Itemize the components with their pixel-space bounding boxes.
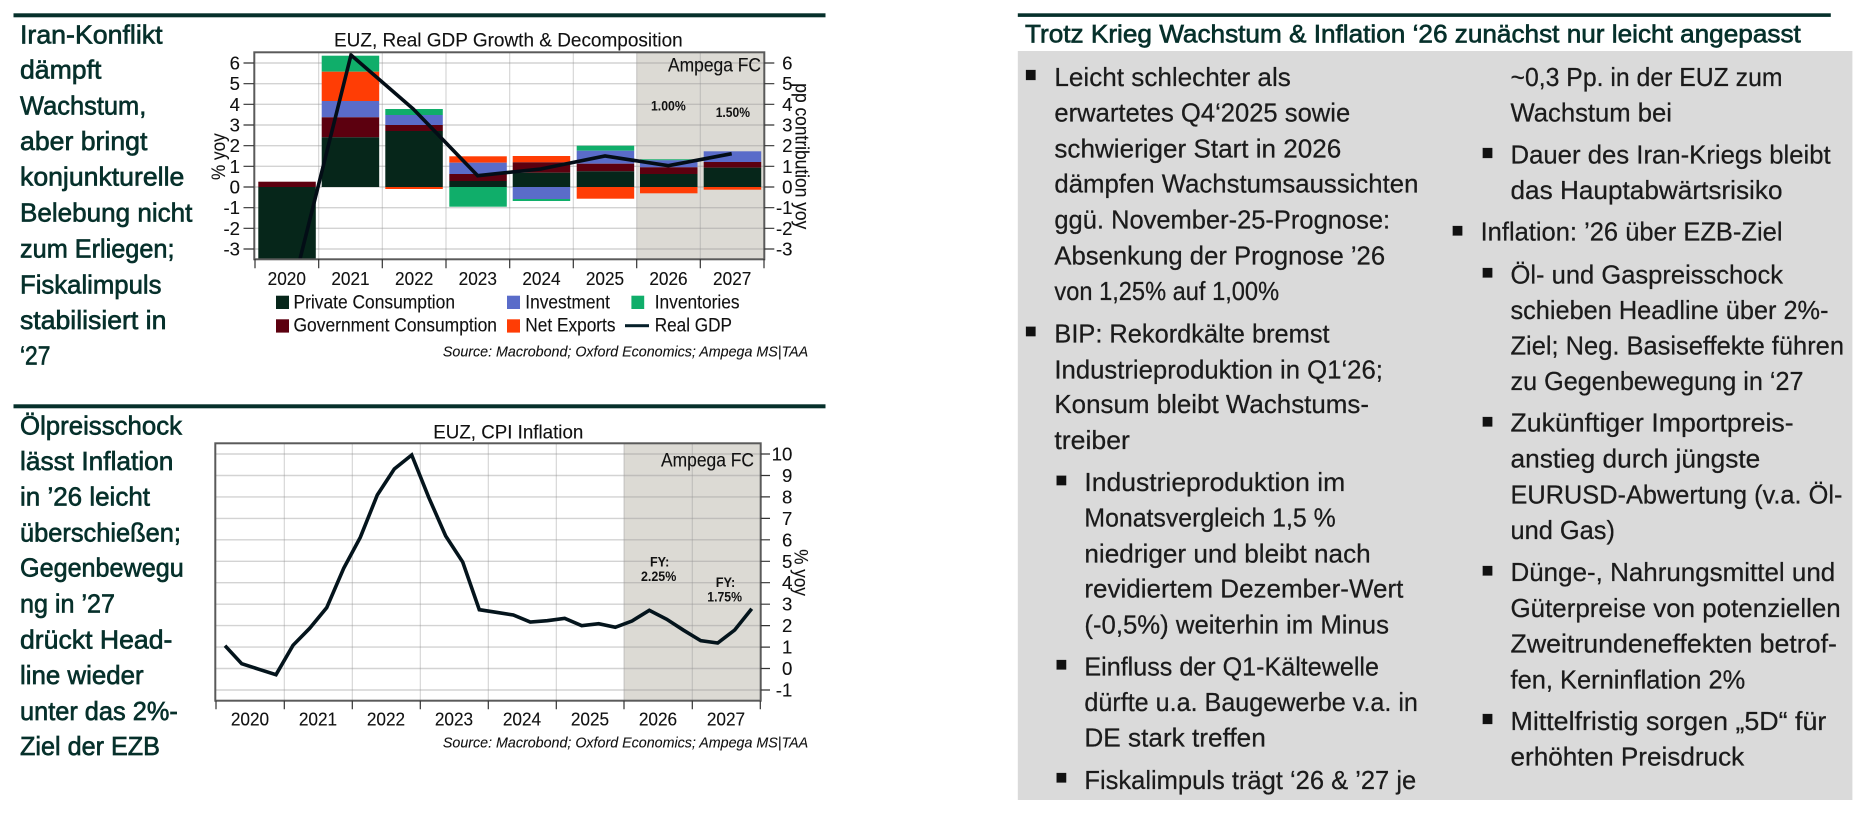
- left axis labels: [223, 52, 240, 260]
- forecast shading: [637, 52, 764, 259]
- heading: GDP commentary: [20, 19, 193, 371]
- right axis labels: -1: [776, 197, 792, 218]
- text column 2: EURUSD-Abwertung (v.a. Öl-: [1510, 479, 1842, 509]
- text column 1: niedriger und bleibt nach: [1084, 538, 1371, 568]
- year labels: 2022: [395, 268, 433, 289]
- year labels: 2022: [367, 709, 405, 730]
- heading: GDP commentary: zum Erliegen;: [20, 233, 174, 263]
- axis labels: 4: [782, 572, 792, 593]
- chart title: EUZ, CPI Inflation: [433, 422, 583, 443]
- heading: inflation commentary: Ölpreisschock: [20, 410, 183, 440]
- panel: GDP section: [14, 13, 826, 371]
- heading: GDP commentary: stabilisiert in: [20, 305, 166, 335]
- year labels: [268, 268, 751, 289]
- axis labels: [772, 444, 792, 700]
- forecast label: Ampega FC: [661, 451, 754, 472]
- legend: Net Exports: [525, 315, 616, 336]
- right axis labels: 2: [782, 135, 792, 156]
- heading: GDP commentary: Iran-Konflikt: [20, 19, 163, 49]
- chart: EUZ CPI inflation: [215, 422, 810, 752]
- heading: GDP commentary: ‘27: [20, 340, 50, 370]
- year labels: 2023: [435, 709, 473, 730]
- text column 2: Mittelfristig sorgen „5D“ für: [1510, 706, 1827, 736]
- source note: Source: Macrobond; Oxford Economics; Ampega MS|TAA: [443, 736, 808, 752]
- year labels: 2024: [522, 268, 561, 289]
- text column 2: das Hauptabwärtsrisiko: [1510, 175, 1782, 205]
- text column 2: Güterpreise von potenziellen: [1510, 593, 1841, 623]
- right axis labels: 3: [782, 114, 792, 136]
- text column 1: Konsum bleibt Wachstums-: [1054, 389, 1369, 419]
- text column 1: Einfluss der Q1-Kältewelle: [1084, 652, 1379, 682]
- heading: GDP commentary: Belebung nicht: [20, 198, 193, 228]
- left axis labels: 5: [230, 73, 240, 94]
- text column 1: dürfte u.a. Baugewerbe v.a. in: [1084, 687, 1418, 717]
- legend: Private Consumption: [294, 292, 455, 313]
- right axis labels: -2: [776, 218, 792, 239]
- axis labels: 0: [782, 658, 792, 679]
- annotation: FY 2027: FY:: [716, 575, 735, 590]
- text column 1: [1026, 62, 1418, 795]
- text column 1: (-0,5%) weiterhin im Minus: [1084, 610, 1389, 640]
- left axis labels: -2: [223, 218, 240, 239]
- year labels: 2025: [571, 709, 609, 730]
- left axis labels: -3: [223, 238, 240, 260]
- heading: inflation commentary: line wieder: [20, 660, 144, 690]
- text column 1: dämpfen Wachstumsaussichten: [1054, 169, 1418, 199]
- text column 1: Absenkung der Prognose ’26: [1054, 240, 1385, 270]
- annotation: FY 2027: 1.75%: [707, 590, 742, 605]
- text column 1: BIP: Rekordkälte bremst: [1054, 318, 1330, 348]
- heading: inflation commentary: in ’26 leicht: [20, 482, 151, 512]
- year labels: 2021: [331, 268, 370, 289]
- right axis labels: -3: [776, 238, 792, 260]
- axis labels: 1: [782, 637, 792, 658]
- legend: Investment: [525, 292, 611, 313]
- heading: inflation commentary: unter das 2%-: [20, 696, 178, 726]
- text column 1: revidiertem Dezember-Wert: [1084, 574, 1404, 604]
- text column 2: Öl- und Gaspreisschock: [1510, 259, 1784, 289]
- legend: Real GDP: [655, 315, 732, 336]
- text column 1: Monatsvergleich 1,5 %: [1084, 503, 1336, 533]
- annotation: FY 2026: 2.25%: [641, 569, 676, 584]
- axis title: % yoy: [789, 549, 810, 596]
- forecast shading: [624, 443, 761, 701]
- heading: GDP commentary: aber bringt: [20, 126, 148, 156]
- axis labels: 8: [782, 486, 792, 507]
- text column 2: schieben Headline über 2%-: [1510, 295, 1828, 325]
- heading: inflation commentary: drückt Head-: [20, 624, 172, 654]
- text column 2: anstieg durch jüngste: [1510, 443, 1760, 473]
- year labels: 2027: [707, 709, 745, 730]
- legend: Inventories: [655, 292, 740, 313]
- axis labels: -1: [776, 680, 792, 700]
- right axis labels: [776, 52, 792, 260]
- left axis labels: 4: [230, 94, 240, 115]
- heading: inflation commentary: Gegenbewegu: [20, 553, 184, 583]
- year labels: 2024: [503, 709, 541, 730]
- heading: GDP commentary: Wachstum,: [20, 90, 146, 120]
- year labels: 2021: [299, 709, 337, 730]
- stacked bars: [258, 56, 761, 259]
- right axis labels: 4: [782, 94, 792, 115]
- heading: inflation commentary: lässt Inflation: [20, 446, 173, 476]
- panel background: [1018, 51, 1852, 800]
- right axis labels: 5: [782, 73, 792, 94]
- text column 2: zu Gegenbewegung in ‘27: [1510, 366, 1804, 396]
- right axis title: pp contribution yoy: [791, 83, 812, 230]
- text column 2: [1453, 62, 1844, 772]
- text column 2: Dauer des Iran-Kriegs bleibt: [1510, 139, 1831, 169]
- left axis labels: -1: [223, 197, 240, 218]
- text column 1: erwartetes Q4‘2025 sowie: [1054, 98, 1350, 128]
- left axis labels: 0: [230, 176, 240, 198]
- text column 2: Zukünftiger Importpreis-: [1510, 408, 1794, 438]
- axis labels: 5: [782, 551, 792, 572]
- left axis title: % yoy: [209, 133, 230, 180]
- text column 1: ggü. November-25-Prognose:: [1054, 204, 1390, 234]
- text column 1: treiber: [1054, 425, 1130, 455]
- text column 2: und Gas): [1510, 515, 1615, 545]
- heading: inflation commentary: ng in ’27: [20, 588, 115, 618]
- left axis labels: 1: [230, 156, 240, 177]
- heading: inflation commentary: Ziel der EZB: [20, 731, 160, 761]
- axis labels: 9: [782, 465, 792, 486]
- panel heading: Trotz Krieg Wachstum & Inflation ‘26 zunächst nur leicht angepasst: [1025, 21, 1801, 49]
- heading: inflation commentary: [20, 410, 184, 761]
- year labels: [231, 709, 745, 730]
- text column 2: erhöhten Preisdruck: [1510, 742, 1745, 772]
- left axis labels: 6: [230, 52, 240, 74]
- annotation: FY 2026: FY:: [650, 555, 669, 570]
- text column 2: Ziel; Neg. Basiseffekte führen: [1510, 330, 1844, 360]
- year labels: 2026: [649, 268, 688, 289]
- chart title: EUZ, Real GDP Growth & Decomposition: [334, 31, 683, 52]
- panel: inflation section: [14, 404, 826, 761]
- axis labels: 6: [782, 529, 792, 550]
- right axis labels: 1: [782, 156, 792, 177]
- heading: inflation commentary: überschießen;: [20, 517, 181, 547]
- source note: Source: Macrobond; Oxford Economics; Ampega MS|TAA: [443, 345, 808, 361]
- axis labels: 3: [782, 594, 792, 615]
- chart: EUZ real GDP growth and decomposition: [209, 31, 812, 361]
- text column 2: fen, Kerninflation 2%: [1510, 664, 1745, 694]
- text column 1: schwieriger Start in 2026: [1054, 133, 1341, 163]
- text column 2: Wachstum bei: [1510, 98, 1672, 128]
- text column 1: von 1,25% auf 1,00%: [1054, 276, 1279, 306]
- right axis labels: 0: [782, 176, 792, 198]
- heading: GDP commentary: dämpft: [20, 54, 102, 84]
- year labels: 2023: [459, 268, 497, 289]
- right axis labels: 6: [782, 52, 792, 74]
- annotation: FY 2026: [641, 555, 676, 584]
- forecast label: Ampega FC: [668, 56, 761, 77]
- text column 2: Zweitrundeneffekten betrof-: [1510, 629, 1837, 659]
- text column 1: Fiskalimpuls trägt ‘26 & ’27 je: [1084, 765, 1416, 795]
- CPI line: [225, 455, 752, 675]
- panel: outlook commentary: [1018, 13, 1852, 800]
- text column 1: Industrieproduktion im: [1084, 467, 1345, 497]
- heading: GDP commentary: Fiskalimpuls: [20, 269, 162, 299]
- axis labels: 10: [772, 444, 792, 464]
- text column 2: Dünge-, Nahrungsmittel und: [1510, 557, 1835, 587]
- axis labels: 7: [782, 508, 792, 529]
- text column 2: Inflation: ’26 über EZB-Ziel: [1481, 217, 1782, 247]
- year labels: 2027: [713, 268, 751, 289]
- text column 1: DE stark treffen: [1084, 723, 1266, 753]
- year labels: 2020: [268, 268, 306, 289]
- legend: Government Consumption: [294, 315, 497, 336]
- annotation: 2026 forecast: 1.00%: [651, 99, 686, 114]
- left axis labels: 3: [230, 114, 240, 136]
- text column 1: Leicht schlechter als: [1054, 62, 1291, 92]
- real GDP line: [300, 55, 732, 259]
- annotation: FY 2027: [707, 575, 742, 605]
- annotation: 2027 forecast: 1.50%: [716, 105, 750, 120]
- year labels: 2020: [231, 709, 269, 730]
- left axis labels: 2: [230, 135, 240, 156]
- axis labels: 2: [782, 615, 792, 636]
- legend: [276, 292, 740, 336]
- text column 2: ~0,3 Pp. in der EUZ zum: [1510, 62, 1782, 92]
- heading: GDP commentary: konjunkturelle: [20, 162, 184, 192]
- year labels: 2025: [586, 268, 624, 289]
- year labels: 2026: [639, 709, 677, 730]
- text column 1: Industrieproduktion in Q1‘26;: [1054, 354, 1383, 384]
